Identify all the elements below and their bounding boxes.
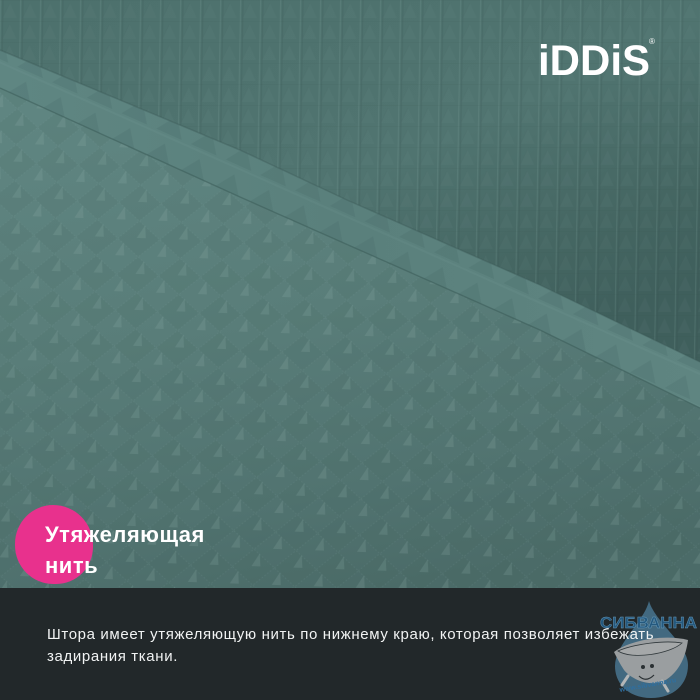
heading: Утяжеляющая bbox=[45, 522, 205, 547]
body text bbox=[47, 626, 654, 665]
icon: water drop bbox=[615, 601, 688, 698]
watermark url: www.sibvanna.ru bbox=[618, 677, 677, 694]
body text: задирания ткани. bbox=[47, 648, 178, 665]
logo: IDDIS: iDDiS bbox=[538, 37, 650, 85]
logo: IDDIS: ® bbox=[649, 37, 655, 46]
upper fabric bbox=[0, 0, 700, 420]
icon: bathtub mascot bbox=[614, 638, 688, 691]
heading bbox=[45, 522, 205, 578]
weighted hem band bbox=[0, 50, 700, 408]
footer panel bbox=[0, 588, 700, 700]
body text: Штора имеет утяжеляющую нить по нижнему краю, которая позволяет избежать bbox=[47, 626, 654, 643]
heading: нить bbox=[45, 553, 98, 578]
pink accent circle bbox=[15, 505, 93, 584]
watermark name: СИБВАННА bbox=[600, 615, 697, 632]
lower fabric with diamond weave bbox=[0, 88, 700, 590]
